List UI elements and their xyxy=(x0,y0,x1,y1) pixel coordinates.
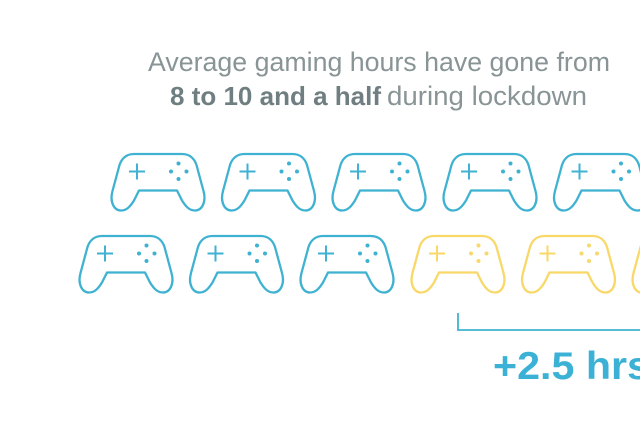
bottom row of blue controllers xyxy=(80,236,393,292)
title: Average gaming hours have gone from xyxy=(148,47,610,77)
bracket xyxy=(458,313,640,330)
bottom row of yellow controllers xyxy=(412,236,640,292)
title: during lockdown xyxy=(387,81,587,111)
extra hours label: +2.5 hrs xyxy=(493,345,640,388)
top row of blue controllers xyxy=(112,154,640,210)
title: 8 to 10 and a half xyxy=(170,81,381,111)
title xyxy=(148,47,610,111)
